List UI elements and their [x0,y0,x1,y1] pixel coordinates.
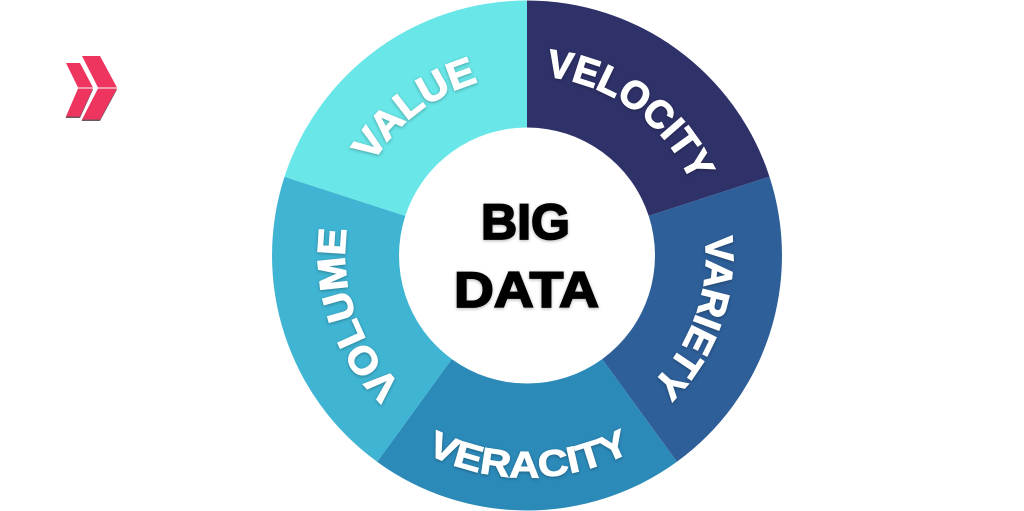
label: variety: VARIETY [657,234,736,404]
center title: big data [454,194,599,318]
label: veracity: VERACITY [434,428,623,480]
label: volume: VOLUME [316,228,396,406]
center title: big data: DATA [454,262,599,318]
segment: veracity [377,359,677,511]
segment: variety [602,177,782,462]
segment: volume [272,177,452,462]
label: value: VALUE [348,56,478,157]
segment: value [284,0,527,216]
donut chart: five Vs of big data [272,0,782,511]
center title: big data: BIG [481,194,570,250]
icon: red double chevron logo [66,56,117,121]
segment: velocity [527,0,770,216]
label: velocity: VELOCITY [550,48,716,176]
